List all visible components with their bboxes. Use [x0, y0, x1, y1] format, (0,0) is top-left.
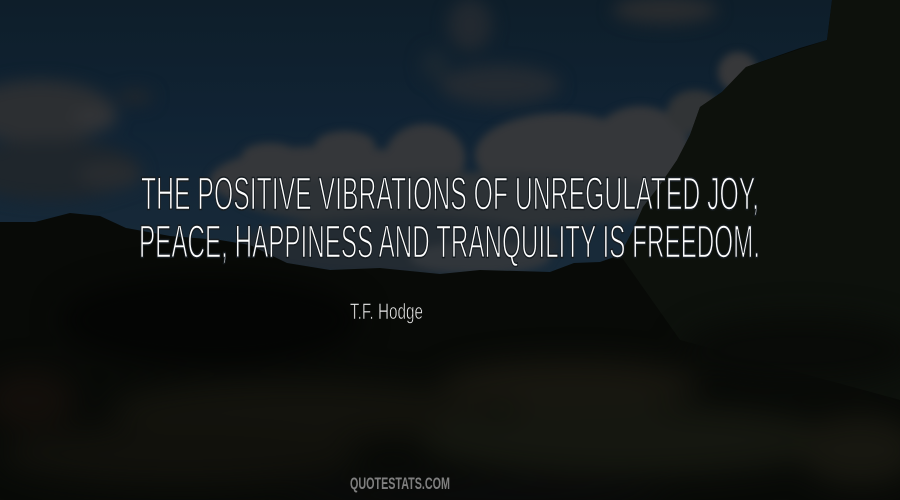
right tree: [624, 68, 745, 246]
site credit: QUOTESTATS.COM: [350, 474, 450, 493]
meadow: [4, 362, 900, 481]
quote text: [139, 168, 760, 268]
author name: T.F. Hodge: [350, 299, 423, 324]
background: clouds: [0, 0, 758, 275]
